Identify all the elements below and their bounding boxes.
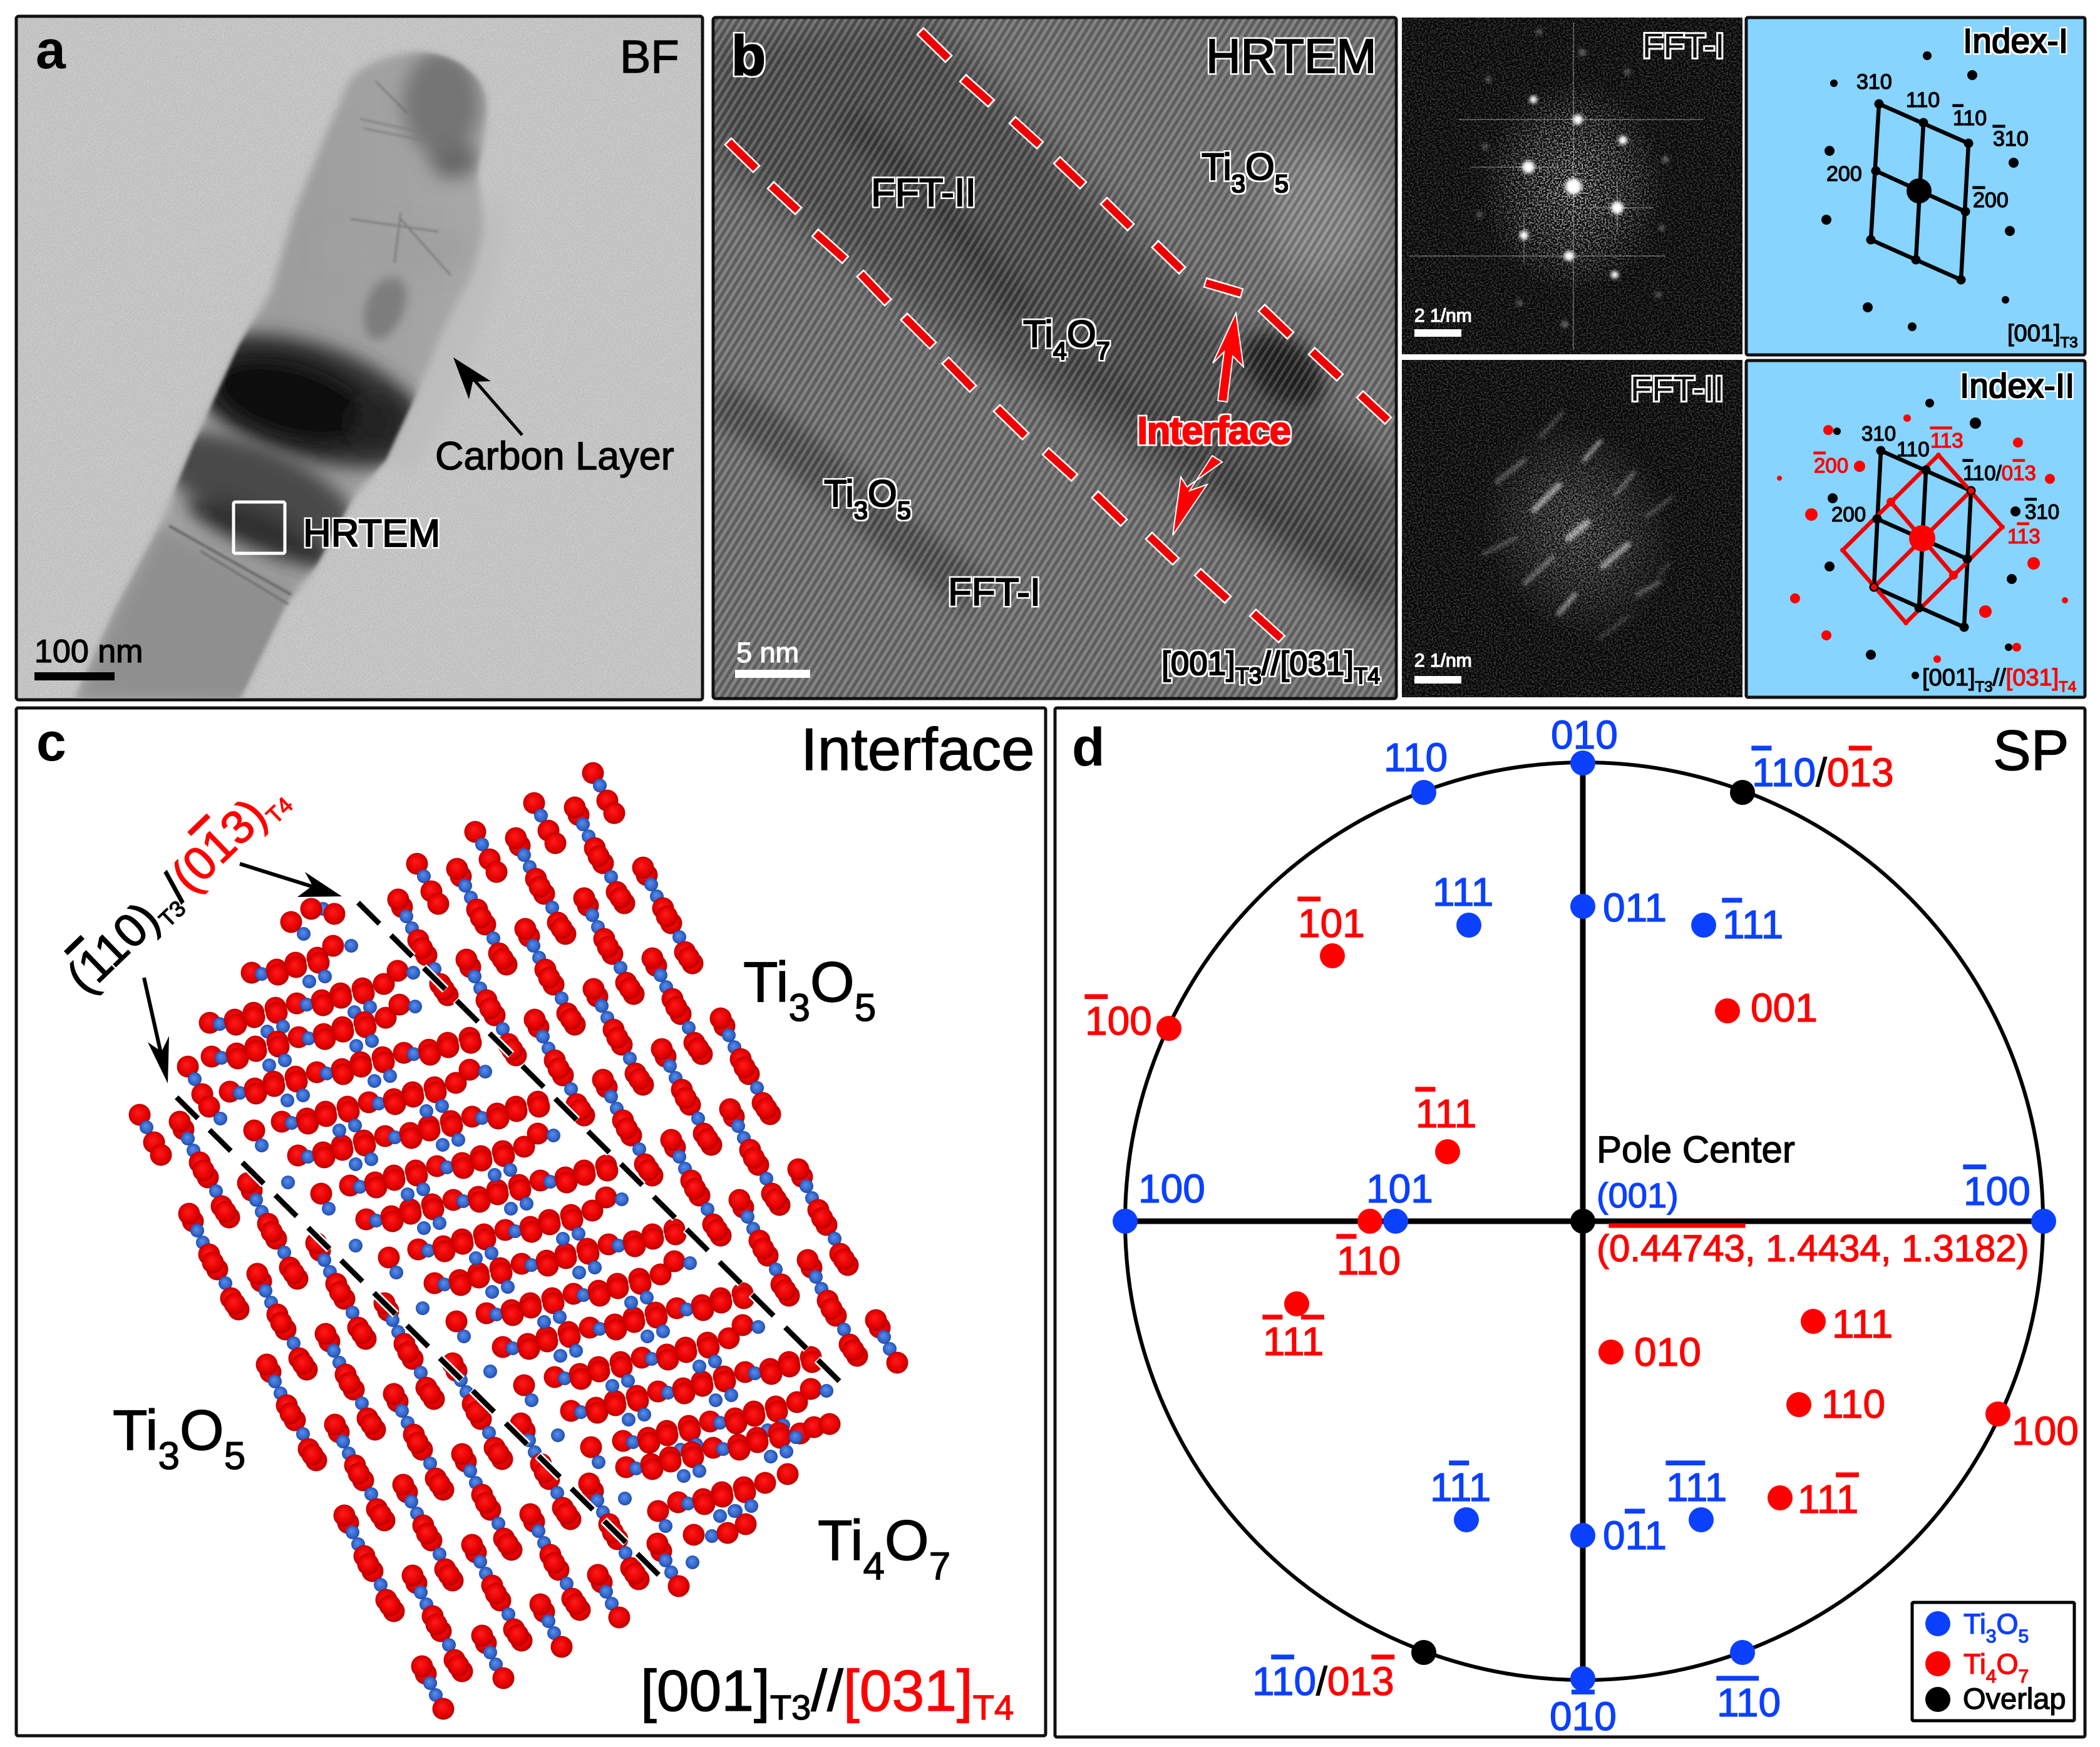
Ti3O5 labels: 111 [1722, 902, 1783, 947]
Ti3O5 labels: 011 [1603, 885, 1667, 930]
panel letter d: d [1072, 717, 1105, 777]
spot labels: 200 [1814, 454, 1848, 477]
spot labels: 110/013 [1963, 461, 2036, 484]
Ti3O5 labels: 111 [1433, 869, 1493, 914]
label Ti3O5 upper right: 3 [788, 986, 810, 1030]
legend: Ti [1964, 1608, 1986, 1640]
label BF: BF [620, 31, 679, 83]
red grid [1843, 455, 2002, 623]
label Ti3O5 upper: 5 [1275, 170, 1289, 198]
label FFT-II: FFT-II [1630, 369, 1724, 408]
label Ti4O7: Ti [1023, 313, 1053, 355]
Ti3O5 labels: 110 [1384, 735, 1448, 780]
label Ti3O5 upper: Ti [1202, 146, 1232, 188]
label FFT-I: FFT-I [948, 571, 1041, 614]
legend: Overlap [1963, 1682, 2066, 1715]
zone axis: [001] [1922, 665, 1975, 691]
label Ti3O5 lower: O [868, 473, 897, 515]
label Ti3O5 upper right: O [810, 951, 855, 1014]
plane label rotated: (110) [56, 891, 169, 1003]
Ti3O5 labels: 010 [1550, 1694, 1617, 1739]
spot labels: 200 [1973, 188, 2009, 212]
zone axis label: [001] [1161, 645, 1235, 682]
label Ti3O5 lower left: 5 [224, 1435, 245, 1478]
scale bar 2 1/nm: 2 1/nm [1414, 305, 1472, 326]
spot labels: 113 [1930, 429, 1964, 452]
arrow: carbon layer [453, 357, 522, 435]
label Ti4O7: 7 [929, 1545, 950, 1588]
title Index-I: Index-I [1963, 21, 2068, 60]
Ti3O5 chains lower left [129, 1055, 690, 1720]
legend: Ti [1964, 1648, 1986, 1680]
zone axis relation: // [811, 1658, 843, 1723]
label Ti3O5 lower left: Ti [113, 1399, 158, 1462]
black grid [1874, 451, 1971, 627]
Ti4O7 labels: 111 [1798, 1477, 1858, 1522]
spot labels: 110 [1953, 106, 1987, 130]
Ti4O7 labels: 100 [2012, 1408, 2079, 1453]
Ti3O5 poles [1113, 751, 2056, 1691]
Ti4O7 labels: 111 [1416, 1091, 1476, 1136]
label Ti4O7: 4 [863, 1545, 885, 1588]
zone axis: T3 [2061, 334, 2078, 351]
legend: O [1997, 1648, 2019, 1680]
Ti4O7 labels: 001 [1751, 985, 1818, 1030]
label Interface: Interface [1137, 409, 1291, 453]
scale bar 2 1/nm: 2 1/nm [1414, 650, 1472, 671]
label Ti4O7: Ti [818, 1509, 863, 1572]
label FFT-I: FFT-I [1642, 26, 1724, 65]
panel FFT-I [1402, 18, 1742, 354]
Ti3O5 labels: 110/013 [1252, 1659, 1394, 1704]
overlap poles [1411, 780, 1755, 1665]
panel c: interface atomic model [16, 708, 1046, 1736]
spot labels: 113 [2007, 525, 2041, 548]
Ti3O5 labels: 111 [1666, 1465, 1727, 1510]
label HRTEM title: HRTEM [1206, 29, 1376, 83]
scale bar 5 nm [735, 637, 810, 678]
pole center label: (001) [1597, 1176, 1679, 1215]
label FFT-II: FFT-II [871, 171, 976, 215]
label Ti3O5 lower: 3 [854, 497, 868, 525]
pole center label: (0.44743, 1.4434, 1.3182) [1597, 1227, 2029, 1269]
Ti3O5 labels: 011 [1603, 1513, 1667, 1558]
Ti3O5 chains upper right [387, 762, 908, 1373]
Ti3O5 labels: 110/013 [1752, 750, 1894, 795]
arrow to lower interface [144, 978, 169, 1084]
zone axis label: //[031] [1262, 645, 1354, 682]
label Ti4O7: O [1067, 313, 1096, 355]
panel Index-I [1746, 18, 2085, 355]
spot labels [1814, 422, 2059, 548]
projection circle and axes [1125, 762, 2044, 1680]
legend: 5 [2019, 1626, 2029, 1647]
HRTEM box marker [234, 502, 285, 553]
label Ti3O5 upper: O [1245, 146, 1275, 188]
interface dashes upper [920, 31, 1389, 421]
label Ti3O5 lower: Ti [824, 473, 854, 515]
zone axis relation: T3 [770, 1688, 811, 1727]
spot labels: 310 [1861, 422, 1896, 445]
legend: 4 [1986, 1666, 1997, 1687]
Ti4O7 labels: 101 [1298, 901, 1365, 946]
spot labels [1826, 70, 2029, 212]
scale bar 2 1/nm [1414, 305, 1472, 337]
pole center label [1597, 1129, 2029, 1269]
zone axis relation: [001] [641, 1658, 770, 1723]
plane label rotated: T4 [261, 792, 298, 829]
title Interface: Interface [801, 716, 1035, 783]
label Ti4O7: 7 [1096, 337, 1110, 365]
plane label rotated: (013) [161, 788, 276, 902]
spot labels: 200 [1826, 162, 1862, 186]
interface dashes lower [728, 141, 1282, 640]
zone axis: T3 [1975, 679, 1993, 695]
spot labels: 310 [1856, 70, 1892, 94]
Ti4O7 labels: 111 [1263, 1319, 1324, 1364]
spot labels: 110 [1906, 88, 1940, 112]
Ti3O5 labels: 010 [1551, 712, 1618, 757]
plane label rotated: / [152, 864, 197, 911]
zone axis label: T4 [1354, 663, 1380, 689]
label Ti3O5 lower: 5 [897, 497, 911, 525]
plane label rotated: T3 [154, 895, 190, 932]
panel b: HRTEM image [708, 13, 1403, 699]
zone axis: T4 [2059, 679, 2076, 695]
panel Index-II [1746, 361, 2085, 697]
panel FFT-II [1402, 360, 1742, 697]
zone axis label: T3 [1235, 663, 1262, 689]
panel letter a: a [36, 20, 66, 80]
panel letter c: c [36, 712, 66, 772]
Ti3O5 labels: 100 [1964, 1169, 2031, 1214]
Ti4O7 labels: 110 [1821, 1381, 1885, 1427]
panel a: bright field TEM image [16, 16, 703, 701]
legend: 3 [1986, 1626, 1997, 1647]
scale bar 100 nm: 100 nm [34, 633, 143, 670]
diffraction spots [1821, 51, 2019, 331]
interface dashed lines [176, 902, 842, 1578]
arrows: interface [1173, 313, 1243, 535]
Ti3O5 labels: 100 [1138, 1166, 1205, 1211]
Ti4O7 labels: 110 [1337, 1238, 1401, 1283]
zone axis relation: [031] [843, 1658, 973, 1723]
panel d: stereographic projection [1055, 708, 2085, 1739]
diffraction grid [1871, 104, 1969, 280]
Ti4O7 labels: 100 [1085, 998, 1152, 1043]
title Index-II: Index-II [1960, 366, 2074, 405]
label Ti4O7: 4 [1053, 337, 1067, 365]
spot labels: 110 [1897, 438, 1930, 461]
label Ti3O5 lower left: O [180, 1399, 224, 1462]
label Ti3O5 upper: 3 [1232, 170, 1245, 198]
Ti4O7 labels: 111 [1832, 1301, 1893, 1346]
pole center label: Pole Center [1597, 1129, 1795, 1171]
arrow to upper interface [240, 864, 342, 897]
Ti3O5 labels: 111 [1430, 1465, 1491, 1510]
Ti4O7 labels [1085, 901, 2079, 1522]
Ti4O7 poles [1156, 943, 2010, 1510]
label Ti3O5 lower left: 3 [158, 1435, 180, 1478]
label Ti3O5 upper right: 5 [855, 986, 876, 1030]
black spots [1825, 399, 2020, 679]
spot labels: 200 [1831, 503, 1866, 526]
spot labels: 310 [2025, 500, 2059, 523]
Ti3O5 labels: 101 [1366, 1166, 1433, 1211]
zone axis: // [1993, 665, 2006, 691]
zone axis relation: T4 [973, 1688, 1014, 1727]
label Ti3O5 upper right: Ti [743, 951, 788, 1014]
Ti4O7 band rows [199, 898, 840, 1569]
legend: 7 [2019, 1666, 2029, 1687]
label Carbon Layer: Carbon Layer [435, 434, 674, 478]
legend: O [1997, 1608, 2019, 1640]
panel letter b: b [731, 25, 766, 88]
scale bar 5 nm: 5 nm [736, 637, 799, 669]
Ti3O5 labels: 110 [1717, 1680, 1781, 1725]
zone axis: [031] [2006, 665, 2059, 691]
Ti4O7 labels: 010 [1634, 1329, 1701, 1375]
legend [1912, 1602, 2074, 1721]
label HRTEM: HRTEM [303, 512, 440, 555]
spot labels: 310 [1993, 127, 2029, 151]
scale bar 2 1/nm [1414, 650, 1472, 684]
label Ti4O7: O [885, 1509, 929, 1572]
zone axis: [001] [2007, 320, 2061, 347]
title SP: SP [1993, 719, 2069, 782]
Ti3O5 labels [1138, 712, 2031, 1739]
red spots [1777, 414, 2068, 663]
